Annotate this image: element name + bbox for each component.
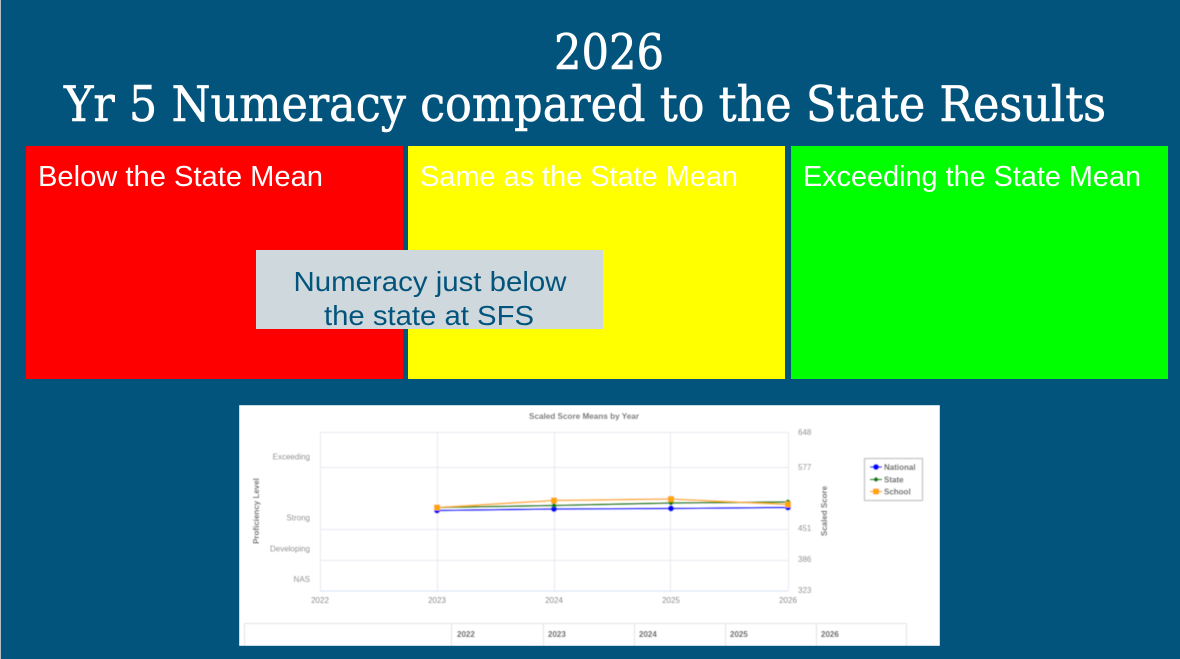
x axis labels: [311, 596, 797, 605]
x axis labels: 2025: [662, 596, 680, 605]
data table header: 2025: [730, 630, 748, 639]
x axis labels: 2022: [311, 596, 329, 605]
title: 2026: [554, 24, 664, 81]
left axis title: Proficiency Level: [252, 478, 261, 544]
right axis: scaled scores: 451: [798, 524, 812, 533]
left axis: proficiency levels: Exceeding: [273, 452, 310, 462]
legend: School: [884, 488, 911, 496]
data table header: 2023: [548, 630, 566, 639]
x axis labels: 2026: [779, 596, 797, 605]
legend: National: [884, 463, 916, 472]
title: [63, 24, 1106, 133]
callout: Numeracy just below: [294, 266, 567, 297]
panel: same as the state mean: [408, 146, 785, 379]
data table header: 2026: [821, 630, 839, 639]
chart panel: scaled score means by year: [239, 405, 940, 646]
legend: [864, 458, 922, 500]
right axis title: Scaled Score: [820, 485, 829, 536]
right axis: scaled scores: 386: [798, 555, 812, 564]
series: state: [437, 500, 790, 508]
panel: below the state mean: [26, 146, 403, 379]
left axis: proficiency levels: NAS: [294, 575, 310, 584]
panel: exceeding the state mean: Exceeding the State Mean: [803, 161, 1141, 193]
panel: same as the state mean: Same as the State Mean: [420, 161, 738, 193]
data table header: [244, 623, 907, 646]
panel: exceeding the state mean: [791, 146, 1168, 379]
data table header: 2024: [639, 630, 657, 639]
x axis labels: 2024: [545, 596, 563, 605]
data table header: 2022: [457, 630, 475, 639]
chart title: Scaled Score Means by Year: [529, 411, 640, 421]
callout: the state at SFS: [324, 300, 534, 331]
title: Yr 5 Numeracy compared to the State Results: [63, 76, 1106, 133]
right axis: scaled scores: 648: [798, 428, 812, 437]
right axis: scaled scores: [798, 428, 812, 595]
right axis: scaled scores: 323: [798, 586, 812, 595]
callout: [256, 250, 603, 331]
series: national: [434, 504, 791, 514]
series: school: [434, 496, 791, 510]
left axis: proficiency levels: Strong: [286, 514, 310, 522]
x axis labels: 2023: [428, 596, 446, 605]
left axis: proficiency levels: [270, 452, 310, 584]
right axis: scaled scores: 577: [798, 463, 812, 472]
legend: State: [884, 476, 904, 484]
panel: below the state mean: Below the State Mean: [38, 161, 323, 193]
left axis: proficiency levels: Developing: [270, 544, 310, 554]
